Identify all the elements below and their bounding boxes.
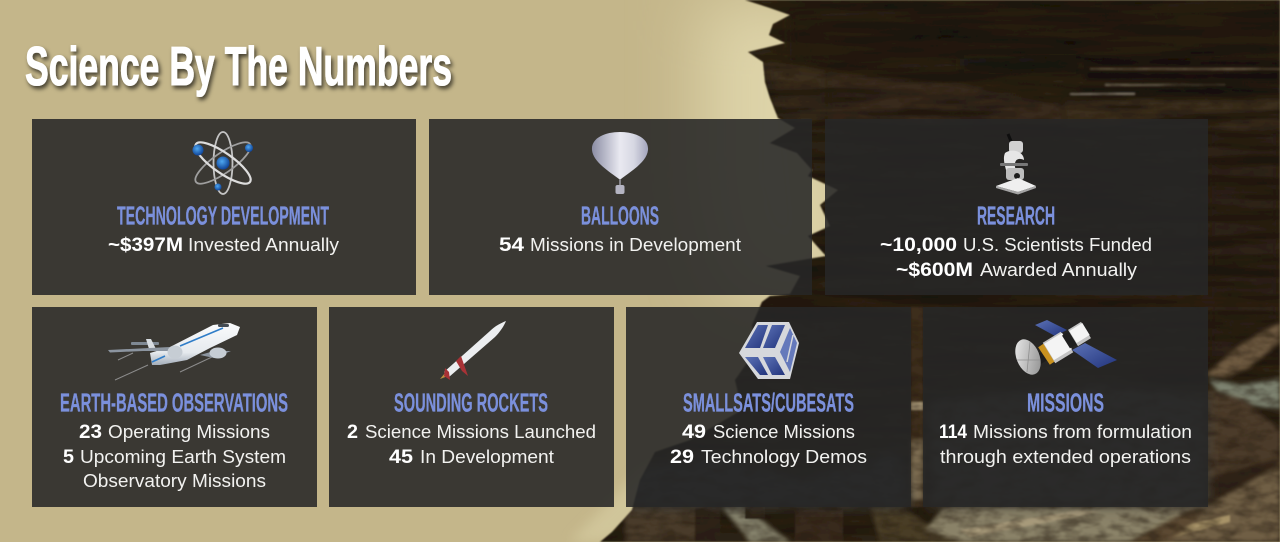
text: research figures: ~10,000 — [880, 234, 957, 256]
icon: satellite — [1010, 320, 1117, 378]
text: mission figures: Missions from formulation — [973, 421, 1192, 442]
text: technology figures: ~$397M — [108, 234, 183, 256]
heading: earth-based observations: EARTH-BASED OBSERVATIONS — [60, 388, 288, 418]
icon: rocket — [440, 321, 506, 380]
text: mission figures — [939, 421, 1192, 467]
text: smallsat figures: Technology Demos — [701, 446, 867, 467]
panel: technology development — [32, 119, 416, 295]
text: research figures: U.S. Scientists Funded — [963, 234, 1152, 255]
upper strata — [790, 0, 1280, 70]
text: balloon figures: Missions in Development — [530, 234, 741, 255]
text: sounding rocket figures — [347, 421, 596, 468]
bottom band — [625, 507, 705, 542]
text: smallsat figures: Science Missions — [713, 421, 855, 442]
background: tan paper and rock photograph — [580, 0, 1280, 542]
icon: atom — [190, 132, 256, 194]
text: mission figures: 114 — [939, 421, 967, 443]
text: smallsat figures: 29 — [670, 446, 694, 468]
text: research figures: ~$600M — [896, 259, 973, 281]
text: technology figures: Invested Annually — [188, 234, 340, 255]
text: earth-based figures — [63, 421, 286, 491]
panel: earth-based observations — [32, 307, 317, 507]
heading: balloons: BALLOONS — [581, 200, 659, 230]
text: sounding rocket figures: In Development — [420, 446, 554, 467]
text: earth-based figures: Operating Missions — [108, 421, 270, 442]
text: sounding rocket figures: 2 — [347, 421, 358, 443]
icon: airplane — [108, 323, 240, 380]
text: earth-based figures: 23 — [79, 421, 102, 443]
text: sounding rocket figures: 45 — [389, 446, 413, 468]
text: research figures: Awarded Annually — [980, 259, 1138, 280]
under panels — [911, 307, 923, 507]
heading: smallsats/cubesats: SMALLSATS/CUBESATS — [683, 388, 854, 418]
text: mission figures: through extended operations — [940, 446, 1191, 467]
text: sounding rocket figures: Science Missions Launched — [365, 421, 596, 442]
text: smallsat figures: 49 — [682, 421, 706, 443]
text: research figures — [880, 234, 1152, 281]
icon: microscope — [996, 134, 1036, 194]
text: earth-based figures: Upcoming Earth System — [80, 446, 286, 467]
panel: missions — [923, 307, 1208, 507]
panel: balloons — [429, 119, 812, 295]
heading: research: RESEARCH — [977, 200, 1055, 230]
text: smallsat figures — [670, 421, 867, 468]
text: technology figures — [108, 234, 340, 256]
icon: cubesat — [739, 322, 799, 379]
panel: sounding rockets — [329, 307, 614, 507]
heading: missions: MISSIONS — [1027, 388, 1104, 418]
text: balloon figures: 54 — [499, 234, 524, 256]
text: earth-based figures: 5 — [63, 446, 74, 468]
text: earth-based figures: Observatory Missions — [83, 470, 266, 491]
heading: sounding rockets: SOUNDING ROCKETS — [394, 388, 548, 418]
lower right rocks — [1205, 322, 1280, 378]
icon: balloon — [592, 132, 648, 194]
panel: research — [825, 119, 1208, 295]
panel: smallsats/cubesats — [626, 307, 911, 507]
heading: technology development: TECHNOLOGY DEVELOPMENT — [117, 200, 329, 230]
title: Science By The Numbers — [25, 35, 452, 97]
